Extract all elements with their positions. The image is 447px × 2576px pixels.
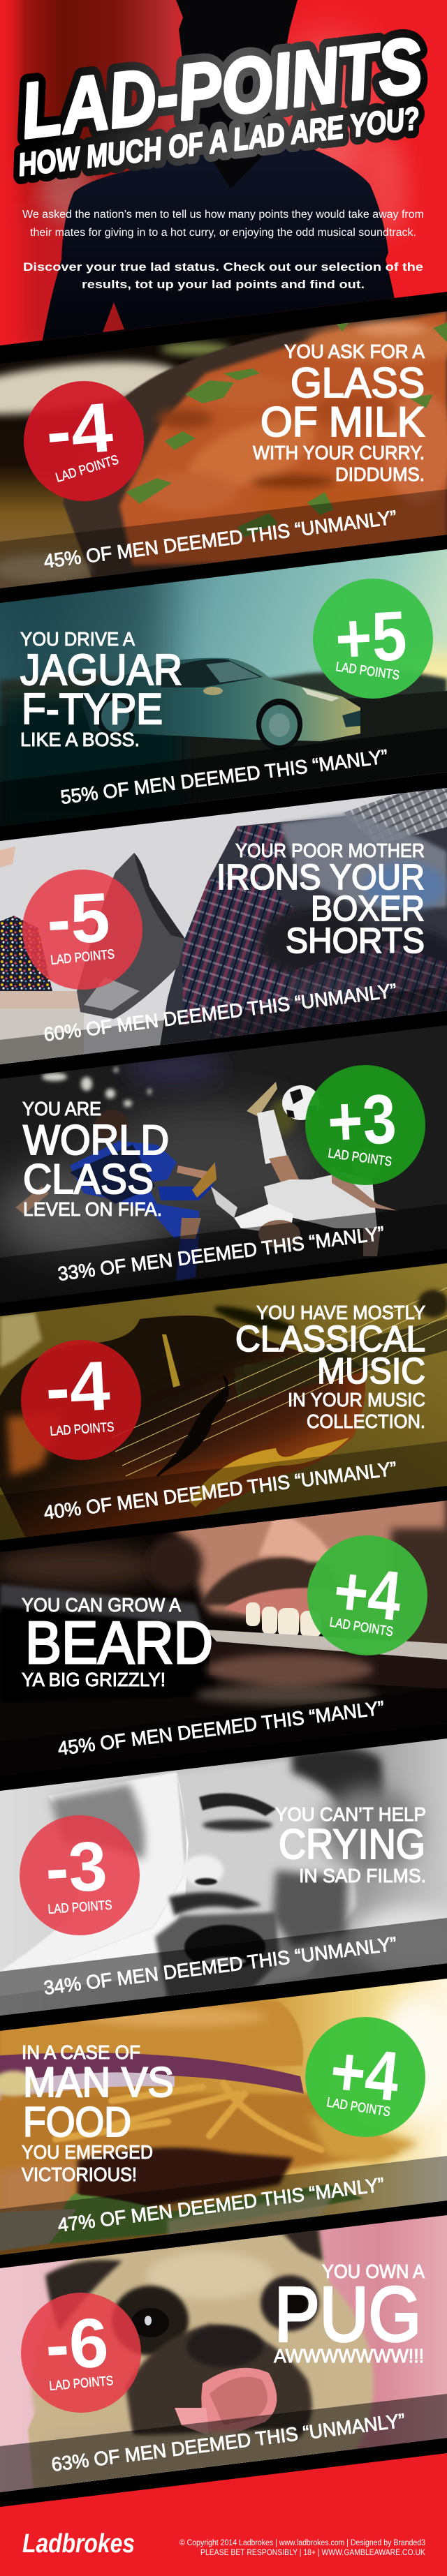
headline: IRONS YOUR xyxy=(217,857,425,897)
headline: YOU OWN A xyxy=(322,2261,425,2282)
stat bar xyxy=(0,1441,447,1540)
headline: SHORTS xyxy=(286,921,425,960)
badge: -4: -4 xyxy=(43,1346,112,1428)
badge: +4: +4 xyxy=(327,2031,403,2116)
stat bar xyxy=(0,2156,447,2255)
panel: beard xyxy=(0,1501,447,1755)
badge: -5 xyxy=(22,870,142,990)
headline: JAGUAR xyxy=(20,646,182,694)
headline: YA BIG GRIZZLY! xyxy=(22,1669,166,1690)
badge: +5: LAD POINTS xyxy=(335,660,400,683)
headline: BEARD xyxy=(25,1610,213,1676)
headline: YOUR POOR MOTHER xyxy=(235,840,425,861)
stat bar: 55% OF MEN DEEMED THIS “MANLY” xyxy=(59,745,389,808)
headline xyxy=(253,341,425,485)
badge: -3: LAD POINTS xyxy=(47,1898,112,1917)
headline: IN SAD FILMS. xyxy=(299,1865,426,1886)
stat bar: 34% OF MEN DEEMED THIS “UNMANLY” xyxy=(43,1933,398,1999)
panel: hero header xyxy=(0,0,447,363)
panel: crying xyxy=(0,1731,447,2024)
copyright xyxy=(179,2539,425,2557)
headline: WORLD xyxy=(23,1117,169,1163)
badge: -6: -6 xyxy=(43,2303,110,2385)
headline: AWWWWWWW!!! xyxy=(274,2345,424,2367)
badge: -5: -5 xyxy=(45,878,112,960)
stat bar: 45% OF MEN DEEMED THIS “MANLY” xyxy=(57,1697,386,1759)
panel: glass of milk xyxy=(0,307,447,593)
stat bar: 63% OF MEN DEEMED THIS “UNMANLY” xyxy=(50,2409,406,2476)
photo: footballers xyxy=(0,1019,447,1312)
intro text: We asked the nation’s men to tell us how many points they would take away from xyxy=(22,209,424,221)
headline: F-TYPE xyxy=(22,685,163,734)
headline: CLASS xyxy=(23,1156,154,1203)
panel: pug xyxy=(0,2215,447,2492)
footer xyxy=(0,2453,447,2576)
headline: YOU CAN GROW A xyxy=(22,1594,181,1616)
headline: YOU DRIVE A xyxy=(20,628,135,650)
badge: +4 xyxy=(305,2017,425,2137)
stat bar xyxy=(0,979,447,1064)
photo: pug xyxy=(0,2215,447,2492)
badge: -3 xyxy=(20,1815,140,1935)
copyright: © Copyright 2014 Ladbrokes | www.ladbrokes.com | Designed by Branded3 xyxy=(179,2539,425,2547)
badge: -6: LAD POINTS xyxy=(49,2374,114,2394)
badge: +5 xyxy=(313,579,433,699)
panel: classical music xyxy=(0,1256,447,1549)
badge: -4 xyxy=(24,381,144,501)
photo: bearded man biting knife xyxy=(0,1501,447,1741)
stat bar xyxy=(0,2394,447,2492)
headline xyxy=(22,1594,213,1690)
headline: IN A CASE OF xyxy=(22,2041,140,2063)
badge: +3 xyxy=(305,1065,425,1185)
photo: curry xyxy=(0,307,447,593)
photo: crying man xyxy=(0,1731,447,2024)
photo: iron and laundry xyxy=(0,782,447,1075)
headline: DIDDUMS. xyxy=(335,463,425,485)
badge: +3: LAD POINTS xyxy=(327,1146,393,1170)
badge: +4 xyxy=(307,1535,427,1655)
headline: IN YOUR MUSIC xyxy=(288,1389,425,1410)
headline: YOU HAVE MOSTLY xyxy=(256,1302,425,1323)
stat bar: 60% OF MEN DEEMED THIS “UNMANLY” xyxy=(43,979,398,1045)
headline xyxy=(235,1302,425,1432)
stat bar xyxy=(0,1204,447,1303)
headline: LEVEL ON FIFA. xyxy=(23,1198,162,1220)
headline: CRYING xyxy=(279,1821,425,1868)
intro text xyxy=(22,209,424,291)
headline: MAN VS xyxy=(23,2059,174,2106)
stat bar xyxy=(0,728,447,826)
headline: CLASSICAL xyxy=(235,1319,425,1360)
panel: fifa xyxy=(0,1019,447,1312)
logo: Ladbrokes: Ladbrokes xyxy=(22,2529,135,2559)
headline: FOOD xyxy=(23,2099,131,2145)
stat bar: 33% OF MEN DEEMED THIS “MANLY” xyxy=(57,1222,386,1285)
headline: OF MILK xyxy=(261,399,425,445)
badge: -4 xyxy=(21,1340,141,1460)
stat bar: 47% OF MEN DEEMED THIS “MANLY” xyxy=(57,2173,386,2236)
badge: +3: +3 xyxy=(325,1080,398,1161)
hero background with silhouette xyxy=(0,0,447,363)
headline: WITH YOUR CURRY. xyxy=(253,442,425,463)
badge: +4: LAD POINTS xyxy=(328,1615,394,1639)
stat bar xyxy=(0,1918,447,2016)
headline xyxy=(22,1098,169,1220)
headline: LIKE A BOSS. xyxy=(20,729,140,750)
panel: jaguar xyxy=(0,544,447,831)
intro text: results, tot up your lad points and find out. xyxy=(82,278,365,291)
headline: MUSIC xyxy=(317,1351,425,1392)
panel: ironing xyxy=(0,782,447,1075)
badge: -5: LAD POINTS xyxy=(50,947,115,968)
stat bar: 40% OF MEN DEEMED THIS “UNMANLY” xyxy=(43,1457,398,1524)
photo: car xyxy=(0,544,447,831)
stat bar xyxy=(0,489,447,588)
stat bar: 45% OF MEN DEEMED THIS “UNMANLY” xyxy=(43,506,398,572)
photo: violin xyxy=(0,1256,447,1549)
badge: -4: LAD POINTS xyxy=(50,1420,115,1439)
headline: COLLECTION. xyxy=(307,1410,425,1432)
intro text: their mates for giving in to a hot curry, or enjoying the odd musical soundtrack. xyxy=(30,227,416,239)
headline: GLASS xyxy=(291,359,425,406)
headline xyxy=(217,840,425,960)
panel: man vs food xyxy=(0,1975,447,2261)
headline: YOU ARE xyxy=(22,1098,101,1119)
headline: BOXER xyxy=(311,888,425,928)
photo: burger xyxy=(0,1975,447,2261)
headline: YOU ASK FOR A xyxy=(284,341,425,362)
badge: +4: +4 xyxy=(330,1551,405,1636)
headline xyxy=(22,2041,174,2185)
copyright: PLEASE BET RESPONSIBLY | 18+ | WWW.GAMBLEAWARE.CO.UK xyxy=(200,2549,425,2557)
badge: -4: LAD POINTS xyxy=(54,453,120,486)
headline: PUG xyxy=(274,2272,421,2358)
headline xyxy=(275,1803,426,1886)
headline: YOU EMERGED xyxy=(22,2141,153,2163)
badge: +5: +5 xyxy=(333,597,409,678)
badge: -4: -4 xyxy=(43,388,116,472)
headline xyxy=(20,628,182,750)
intro text: Discover your true lad status. Check out our selection of the xyxy=(23,260,423,274)
badge: -3: -3 xyxy=(43,1827,109,1908)
headline: YOU CAN’T HELP xyxy=(275,1803,426,1825)
badge: -6 xyxy=(21,2293,141,2413)
headline: VICTORIOUS! xyxy=(22,2164,137,2185)
badge: +4: LAD POINTS xyxy=(325,2095,391,2120)
